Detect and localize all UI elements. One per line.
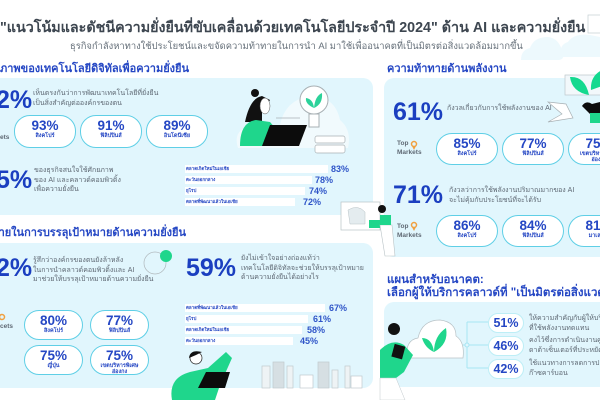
pill: Singapore: 93%	[31, 118, 59, 133]
illustration: AI brain box and standing person	[341, 202, 395, 256]
pill: Philippines: 77%	[519, 136, 547, 151]
pill: Indonesia: อินโดนีเซีย	[164, 133, 190, 139]
pill: Philippines	[80, 115, 142, 148]
pill: Hong Kong: เขตบริหารพิเศษ	[101, 363, 138, 369]
heading: future plan: แผนสำหรับอนาคต:	[387, 274, 484, 286]
bar chart: markets: 83%	[331, 164, 349, 174]
text: 85 percent: ของธุรกิจสนใจใช้ศักยภาพ	[34, 167, 113, 174]
label: top markets	[397, 223, 422, 239]
label: top markets: Top	[397, 140, 408, 147]
decorative clouds top right	[521, 14, 600, 60]
pill: Philippines	[90, 310, 149, 340]
stat: 42 percent: 42%	[493, 362, 519, 376]
pill: Philippines: ฟิลิปปินส์	[522, 151, 544, 157]
text: 59 percent: ด้านความยั่งยืนได้อย่างไร	[241, 274, 319, 281]
illustration: city buildings	[262, 362, 362, 388]
bar chart: markets: 61%	[313, 314, 331, 324]
pill: Indonesia	[146, 115, 208, 148]
text: 85 percent	[34, 166, 121, 193]
text: 59 percent: เทคโนโลยีดิจิทัลจะช่วยให้บรรลุเป้าหมาย	[241, 265, 364, 272]
pill: Singapore: 86%	[453, 218, 481, 233]
text: 85 percent: ของ AI และคลาวด์คอมพิวติ้ง	[34, 177, 121, 184]
bar chart: markets: 58%	[307, 325, 325, 335]
pill: Singapore	[436, 133, 498, 165]
pill: Philippines: ฟิลิปปินส์	[522, 233, 544, 239]
pill: Singapore	[14, 115, 76, 148]
bar chart: markets: 78%	[315, 175, 333, 185]
panel: future plan	[384, 302, 600, 387]
pill: Singapore: 85%	[453, 136, 481, 151]
connector lines	[463, 322, 488, 368]
stat: 46 percent	[488, 336, 524, 356]
illustration: plant box	[565, 70, 600, 95]
pill: Philippines: 77%	[106, 313, 133, 328]
icon: paper plane	[548, 102, 573, 122]
text: 42 percent: ก๊าซคาร์บอน	[529, 370, 568, 377]
stat: 51 percent: 51%	[493, 316, 519, 330]
pill: Malaysia	[568, 215, 600, 247]
label: top markets: Markets	[397, 149, 422, 156]
bar chart: markets: ยุโรป	[186, 316, 196, 321]
pill: Philippines: ฟิลิปปินส์	[100, 133, 122, 139]
bar chart: markets: ยุโรป	[186, 188, 196, 193]
text: 42 percent	[529, 358, 600, 377]
pill: Philippines: ฟิลิปปินส์	[109, 328, 130, 334]
bar chart: markets: 74%	[309, 186, 327, 196]
stat: 51 percent	[488, 313, 524, 333]
label: top markets	[397, 140, 422, 156]
bar chart: markets: ตลาดเกิดใหม่ในเอเชีย	[186, 166, 229, 171]
bar chart: markets: ตะวันออกกลาง	[186, 338, 215, 343]
pill: Philippines	[502, 215, 564, 247]
icon: pin 3	[0, 314, 4, 320]
heading: energy challenge: ความท้าทายด้านพลังงาน	[387, 63, 507, 75]
pill: Hong Kong	[90, 345, 149, 375]
label: top markets: ets	[0, 134, 9, 141]
stat: 61 percent: 61%	[393, 98, 443, 126]
icon: pin 1	[412, 142, 416, 150]
icon: globe with leaf	[144, 250, 172, 274]
pill: Hong Kong	[568, 133, 600, 165]
text: 71 percent: จะไม่คุ้มกับประโยชน์ที่จะได้รับ	[449, 197, 541, 204]
bar chart: markets: 72%	[303, 197, 321, 207]
illustration: woman with laptop and bulb	[237, 86, 349, 153]
pill: Indonesia: 89%	[163, 118, 191, 133]
bar chart: markets: ตลาดที่พัฒนาแล้วในเอเชีย	[186, 199, 238, 204]
pill: Singapore: สิงคโปร์	[44, 328, 63, 334]
text: 71 percent	[449, 186, 574, 204]
text: 85 percent: เพื่อความยั่งยืน	[34, 186, 79, 193]
bar chart: markets: 67%	[329, 303, 347, 313]
pill: Philippines: 91%	[97, 118, 125, 133]
stat: 42 percent	[488, 359, 524, 379]
panel: sustainability goals	[0, 243, 373, 388]
stat: 59 percent: 59%	[186, 254, 236, 282]
pill: Philippines: 84%	[519, 218, 547, 233]
pill: Hong Kong: ฮ่องกง	[112, 369, 127, 375]
subtitle: ธุรกิจกำลังหาทางใช้ประโยชน์และขจัดความท้าทายในการนำ AI มาใช้เพื่ออนาคตที่เป็นมิตรต่อสิ่งแวดล้อมมากขึ้น	[70, 40, 523, 51]
text: 59 percent: ยังไม่เข้าใจอย่างถ่องแท้ว่า	[241, 255, 320, 262]
panel: digital potential	[0, 78, 373, 215]
text: 72 percent: มาช่วยให้บรรลุเป้าหมายด้านความยั่งยืน	[33, 276, 153, 283]
pill: Singapore	[436, 215, 498, 247]
illustration: person top right	[582, 102, 600, 123]
text: 72 percent	[33, 256, 154, 283]
bar chart: markets: ตะวันออกกลาง	[186, 177, 215, 182]
text: 72 percent: รู้สึกว่าองค์กรของตนยังล้าหลัง	[33, 257, 123, 264]
text: 71 percent: กังวลว่าการใช้พลังงานปริมาณมากของ AI	[449, 187, 574, 194]
bar chart: markets: 45%	[300, 336, 318, 346]
label: top markets: Top	[397, 223, 408, 230]
pill: Singapore	[24, 310, 83, 340]
text: 92 percent	[33, 88, 158, 107]
text: 61 percent: กังวลเกี่ยวกับการใช้พลังงานของ AI	[447, 105, 552, 112]
pill: Japan: 75%	[40, 348, 67, 363]
text: 51 percent	[529, 314, 600, 332]
illustration: person with tablet and cloud	[380, 320, 463, 400]
bar chart: markets: ตลาดเกิดใหม่ในเอเชีย	[186, 327, 229, 332]
title: "แนวโน้มและดัชนีความยั่งยืนที่ขับเคลื่อนด้วยเทคโนโลยีประจำปี 2024" ด้าน AI และความยั่งยืน	[0, 20, 585, 36]
text: 72 percent: ในการนำคลาวด์คอมพิวติ้งและ AI	[33, 267, 134, 274]
bar chart: markets	[185, 303, 347, 346]
bar chart: markets	[185, 164, 349, 207]
bar chart: markets: ตลาดที่พัฒนาแล้วในเอเชีย	[186, 305, 238, 310]
text: 92 percent: เป็นสิ่งสำคัญต่อองค์กรของตน	[33, 100, 122, 107]
pill: Japan	[24, 345, 83, 375]
icon: pin 2	[412, 222, 416, 231]
pill: Singapore: สิงคโปร์	[35, 133, 55, 139]
pill: Singapore: สิงคโปร์	[457, 151, 477, 157]
text: 92 percent: เห็นตรงกันว่าการพัฒนาเทคโนโลยีที่ยั่งยืน	[33, 90, 158, 97]
pill: Japan: ญี่ปุ่น	[48, 363, 59, 369]
pill: Singapore: สิงคโปร์	[457, 233, 477, 239]
text: 51 percent: ที่ใช้พลังงานทดแทน	[529, 325, 589, 332]
label: top markets: cets	[0, 323, 13, 330]
label: top markets: Markets	[397, 232, 422, 239]
heading: digital potential: ภาพของเทคโนโลยีดิจิทัลเพื่อความยั่งยืน	[0, 63, 189, 75]
pill: Singapore: 80%	[40, 313, 67, 328]
pill: Philippines	[502, 133, 564, 165]
illustration: man with laptop	[171, 351, 232, 400]
pill: Hong Kong: 75%	[106, 348, 133, 363]
text: 59 percent	[241, 254, 364, 281]
panel: energy challenge	[384, 78, 600, 257]
heading: future plan	[387, 274, 600, 300]
stat: 71 percent: 71%	[393, 181, 443, 209]
stat: 46 percent: 46%	[493, 339, 519, 353]
text: 46 percent	[529, 335, 600, 354]
